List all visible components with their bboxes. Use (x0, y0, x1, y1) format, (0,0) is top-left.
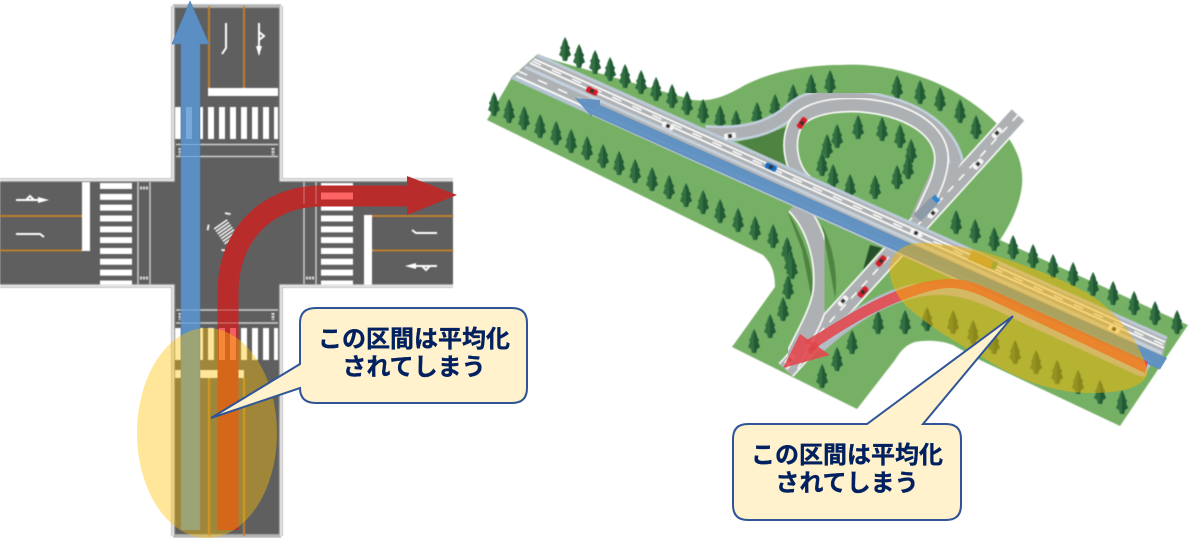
southwest ramp (790, 205, 823, 365)
panel: interchange illustration (487, 37, 1188, 520)
blue straight-through arrow (172, 1, 209, 530)
south approach markings (175, 310, 278, 536)
shaded embankments (737, 127, 882, 300)
callout: right (733, 316, 1013, 520)
blue through-traffic arrow (575, 98, 1167, 370)
main road (512, 55, 1167, 368)
outer ramp (705, 97, 956, 162)
green ground (487, 55, 1188, 426)
callout: left: されてしまう (342, 354, 486, 381)
cross road (786, 115, 1018, 370)
trees (488, 37, 1183, 414)
road surface (0, 6, 453, 536)
panel: intersection plan (0, 1, 527, 538)
inner loop ramp (780, 105, 942, 245)
exit ramp under red arrow (818, 288, 1147, 372)
yellow highlight ellipse (890, 243, 1147, 393)
east approach markings (304, 182, 453, 285)
trucks (914, 195, 998, 270)
north approach markings (175, 6, 278, 156)
callout: right: この区間は平均化 (751, 442, 943, 469)
callout: left (211, 308, 527, 418)
centre marking (205, 211, 247, 253)
yellow highlight ellipse (137, 328, 277, 538)
west approach markings (0, 182, 150, 285)
red exit arrow (783, 279, 1148, 373)
callout: right: されてしまう (775, 470, 919, 497)
red right-turn arrow (218, 176, 457, 530)
cars (585, 86, 1121, 366)
callout: left: この区間は平均化 (318, 326, 510, 353)
